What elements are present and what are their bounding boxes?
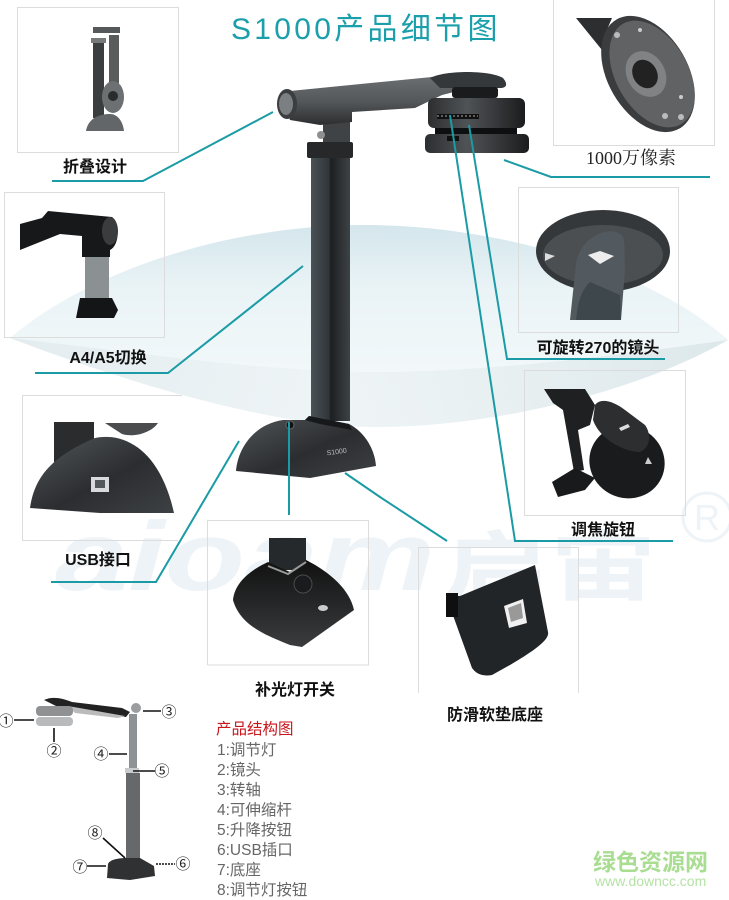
icon: base bottom photo [446,565,548,675]
structure legend: 5:升降按钮 [217,821,292,839]
diagram leader lines [14,711,175,866]
icon: lens underside photo [576,0,714,149]
icon: pivot arm photo [20,211,118,318]
scanner base: S1000 [326,448,347,457]
watermark logo: 启宙 [442,526,657,611]
panel: anti-slip pad base [418,548,578,724]
scanner head [425,72,529,153]
icon: lens top photo [536,210,670,320]
diagram numbers: ⑧ [87,825,103,842]
scanner: main product [236,72,529,478]
structure legend: 2:镜头 [217,760,261,779]
label: A4/A5 switch: A4/A5切换 [69,349,147,367]
structure legend: 6:USB插口 [217,841,293,859]
icon: focus knob photo [544,389,677,511]
diagram scanner [36,698,155,880]
diagram numbers: ② [46,743,62,760]
structure legend [216,720,307,899]
label: USB port: USB接口 [65,551,131,569]
callout lines [35,112,710,582]
panel: USB port [22,396,182,569]
label: fill light switch: 补光灯开关 [255,680,335,699]
panel: 270 degree rotating lens [518,188,678,357]
structure legend: 1:调节灯 [217,741,276,759]
structure legend: 4:可伸缩杆 [217,801,292,819]
diagram numbers: ④ [93,746,109,763]
icon: folded scanner photo [86,27,124,131]
diagram numbers: ⑤ [154,763,170,780]
label: focus knob: 调焦旋钮 [571,520,635,539]
site watermark: 绿色资源网 [593,849,708,875]
diagram numbers [0,704,191,876]
diagram numbers: ③ [161,704,177,721]
structure legend: 7:底座 [217,861,261,879]
label: folding design: 折叠设计 [63,157,127,176]
icon: USB base photo [30,422,174,513]
panel: 10 megapixel lens [554,0,714,168]
panel: folding design [18,8,178,176]
panel: A4/A5 switch [4,192,164,367]
watermark logo: aioam [55,501,435,611]
title: S1000产品细节图 [231,13,501,46]
structure legend: 3:转轴 [217,781,261,799]
scanner base [236,416,376,478]
label: rotating lens: 可旋转270的镜头 [537,338,659,357]
watermark logo: R [694,497,720,538]
watermark logo [55,493,729,611]
site watermark [593,849,708,889]
site watermark: www.downcc.com [594,873,706,889]
structure legend: 产品结构图 [216,720,294,738]
structure legend: 8:调节灯按钮 [217,881,307,899]
scanner column [307,122,353,421]
structure diagram [0,698,191,880]
scanner arm [277,77,462,125]
panel: fill light switch [208,520,368,699]
diagram numbers: ⑦ [72,859,88,876]
label: anti-slip pad: 防滑软垫底座 [447,705,543,724]
label: 10 megapixel: 1000万像素 [586,148,676,168]
background swoosh [10,225,728,427]
diagram numbers: ⑥ [175,856,191,873]
icon: fill light photo [233,538,354,647]
panel: focus knob [524,370,686,539]
